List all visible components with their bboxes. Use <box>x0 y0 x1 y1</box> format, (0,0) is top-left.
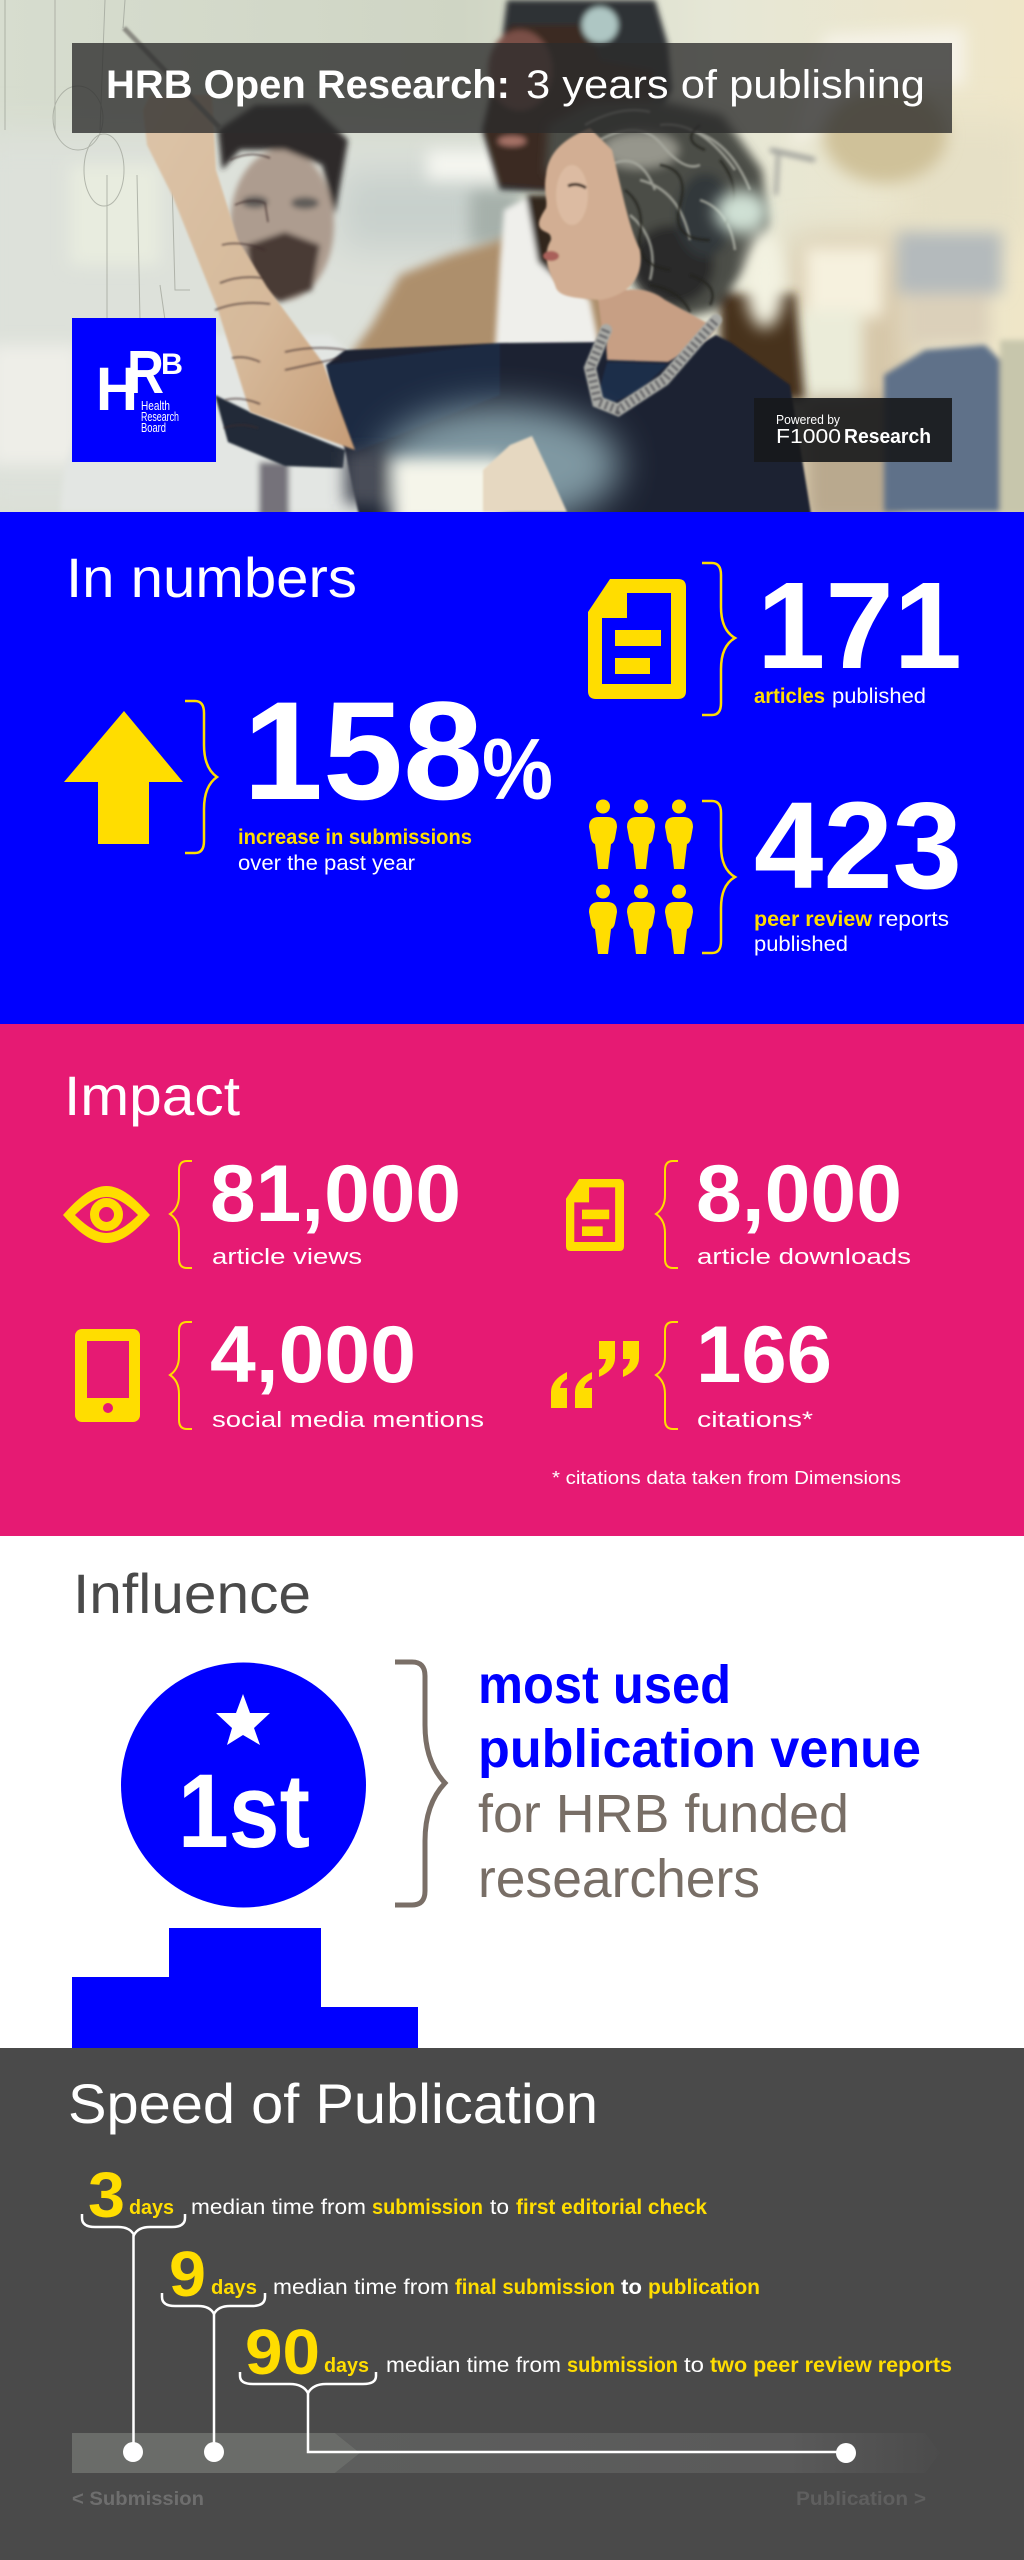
number: 158%: % <box>482 722 553 818</box>
person at right <box>770 150 1024 515</box>
brace <box>170 1161 192 1268</box>
pen <box>124 28 220 128</box>
number: 423: 423 <box>754 778 962 915</box>
logo: Health Research Board: B <box>161 348 183 381</box>
medal text: 1st: 1st <box>178 1753 310 1870</box>
label: social media mentions <box>212 1407 484 1432</box>
statement text: publication venue <box>478 1719 921 1779</box>
title text <box>106 63 925 107</box>
icon: document <box>566 1179 624 1251</box>
item: 9 days: to <box>621 2276 642 2299</box>
stat: 158% increase in submissions <box>64 672 553 875</box>
woman's face and neck <box>539 128 716 366</box>
heading: influence: Influence <box>73 1562 311 1625</box>
logo: Health Research Board: Research <box>141 409 179 424</box>
item: 9 days <box>169 2238 760 2310</box>
icon: star <box>216 1694 270 1745</box>
label: articles <box>754 685 825 708</box>
panel: influence <box>0 1536 1024 2048</box>
number: 4,000: 4,000 <box>210 1310 416 1400</box>
brace <box>702 801 735 953</box>
label <box>238 826 472 875</box>
stat: article downloads <box>566 1149 911 1269</box>
man behind the arm <box>62 102 356 512</box>
label: over the past year <box>238 852 415 875</box>
stat: social media mentions <box>75 1310 484 1432</box>
footnote: * citations data taken from Dimensions <box>552 1468 901 1488</box>
medal <box>121 1662 366 1908</box>
item: 90 days: to <box>684 2354 704 2377</box>
label: peer review <box>754 908 873 931</box>
panel: speed of publication <box>0 2048 1024 2560</box>
number: 166: 166 <box>696 1310 832 1400</box>
timeline start label: < Submission <box>72 2489 204 2510</box>
item: 3 days: first editorial check <box>516 2196 707 2219</box>
brace <box>656 1322 678 1429</box>
icon: document <box>588 579 686 699</box>
statement text <box>478 1655 921 1909</box>
logo: Health Research Board: R <box>127 338 164 406</box>
logo: Powered by F1000Research <box>754 398 952 462</box>
stat: 171 articles published <box>588 558 962 715</box>
label: reports <box>878 908 949 931</box>
stat: 423 peer review reports <box>589 778 962 956</box>
stat: article views <box>63 1149 461 1269</box>
timeline end label: Publication > <box>796 2489 926 2510</box>
logo: Health Research Board <box>72 318 216 462</box>
item: 9 days: median time from <box>273 2276 449 2299</box>
label <box>754 908 949 956</box>
number: 8,000: 8,000 <box>696 1149 902 1239</box>
heading: speed of publication: Speed of Publication <box>68 2072 598 2135</box>
woman's hand <box>483 436 567 512</box>
item: 90 days: 90 <box>245 2316 320 2388</box>
brace <box>395 1662 445 1905</box>
title bar <box>72 43 952 133</box>
stat: citations <box>551 1310 832 1432</box>
statement text: most used <box>478 1655 731 1715</box>
label: increase in submissions <box>238 826 472 849</box>
item: 90 days: two peer review reports <box>710 2354 952 2377</box>
jacket and shirt <box>343 230 620 365</box>
brace <box>170 1322 192 1429</box>
logo: Health Research Board: Health <box>141 398 170 413</box>
item: 9 days: final submission <box>455 2276 615 2299</box>
title text: HRB Open Research: <box>106 63 510 107</box>
logo: Health Research Board: Board <box>141 420 166 435</box>
statement text: for HRB funded <box>478 1784 849 1844</box>
logo: Powered by F1000Research: F1000 <box>776 426 841 448</box>
item: 9 days: publication <box>648 2276 760 2299</box>
label: article views <box>212 1244 362 1269</box>
man at the back <box>482 0 672 192</box>
photo: colleagues at a glass board <box>0 0 1024 528</box>
icon: group of people <box>589 800 693 954</box>
statement text: researchers <box>478 1849 760 1909</box>
label: article downloads <box>697 1244 911 1269</box>
icon: up arrow <box>64 711 183 844</box>
item: 3 days: median time from <box>191 2196 366 2219</box>
item: 90 days: submission <box>567 2354 678 2377</box>
item: 9 days: 9 <box>169 2238 206 2310</box>
label: citations* <box>697 1407 814 1432</box>
woman's hair <box>545 100 805 400</box>
label: published <box>754 933 848 956</box>
logo: Powered by F1000Research: Research <box>844 426 931 448</box>
logo: Powered by F1000Research: Powered by <box>776 413 841 427</box>
item: 90 days: median time from <box>386 2354 561 2377</box>
item: 3 days: to <box>490 2196 509 2219</box>
item: 9 days: days <box>211 2277 257 2299</box>
brace <box>185 701 217 853</box>
item: 3 days: 3 <box>88 2159 125 2231</box>
podium <box>72 1928 418 2048</box>
item: 90 days: days <box>324 2355 369 2377</box>
glass board sketches <box>5 0 190 320</box>
item: 3 days <box>88 2159 707 2231</box>
number: 81,000: 81,000 <box>210 1149 461 1239</box>
title text: 3 years of publishing <box>526 63 925 107</box>
panel: impact <box>0 1024 1024 1536</box>
woman's dark top <box>215 335 812 520</box>
icon: quotation marks <box>551 1341 639 1408</box>
panel: in numbers <box>0 512 1024 1024</box>
necklace <box>590 320 716 410</box>
number: 171: 171 <box>757 558 962 695</box>
item: 3 days: days <box>129 2197 174 2219</box>
item: 3 days: submission <box>372 2196 483 2219</box>
brace <box>702 563 735 715</box>
item: 90 days <box>245 2316 952 2388</box>
label <box>754 685 926 708</box>
icon: eye <box>63 1186 150 1243</box>
brace <box>656 1161 678 1268</box>
number: 158%: 158 <box>243 672 483 829</box>
logo: Health Research Board: H <box>96 355 138 423</box>
label: published <box>832 685 926 708</box>
icon: phone <box>75 1329 140 1422</box>
heading: impact: Impact <box>64 1064 240 1127</box>
podium with medal <box>72 1662 418 2048</box>
timeline band <box>72 2433 940 2473</box>
connector lines and dots <box>82 2214 856 2463</box>
panel: header photo <box>0 0 1024 528</box>
heading: in numbers: In numbers <box>66 546 357 609</box>
raised arm <box>143 95 355 450</box>
